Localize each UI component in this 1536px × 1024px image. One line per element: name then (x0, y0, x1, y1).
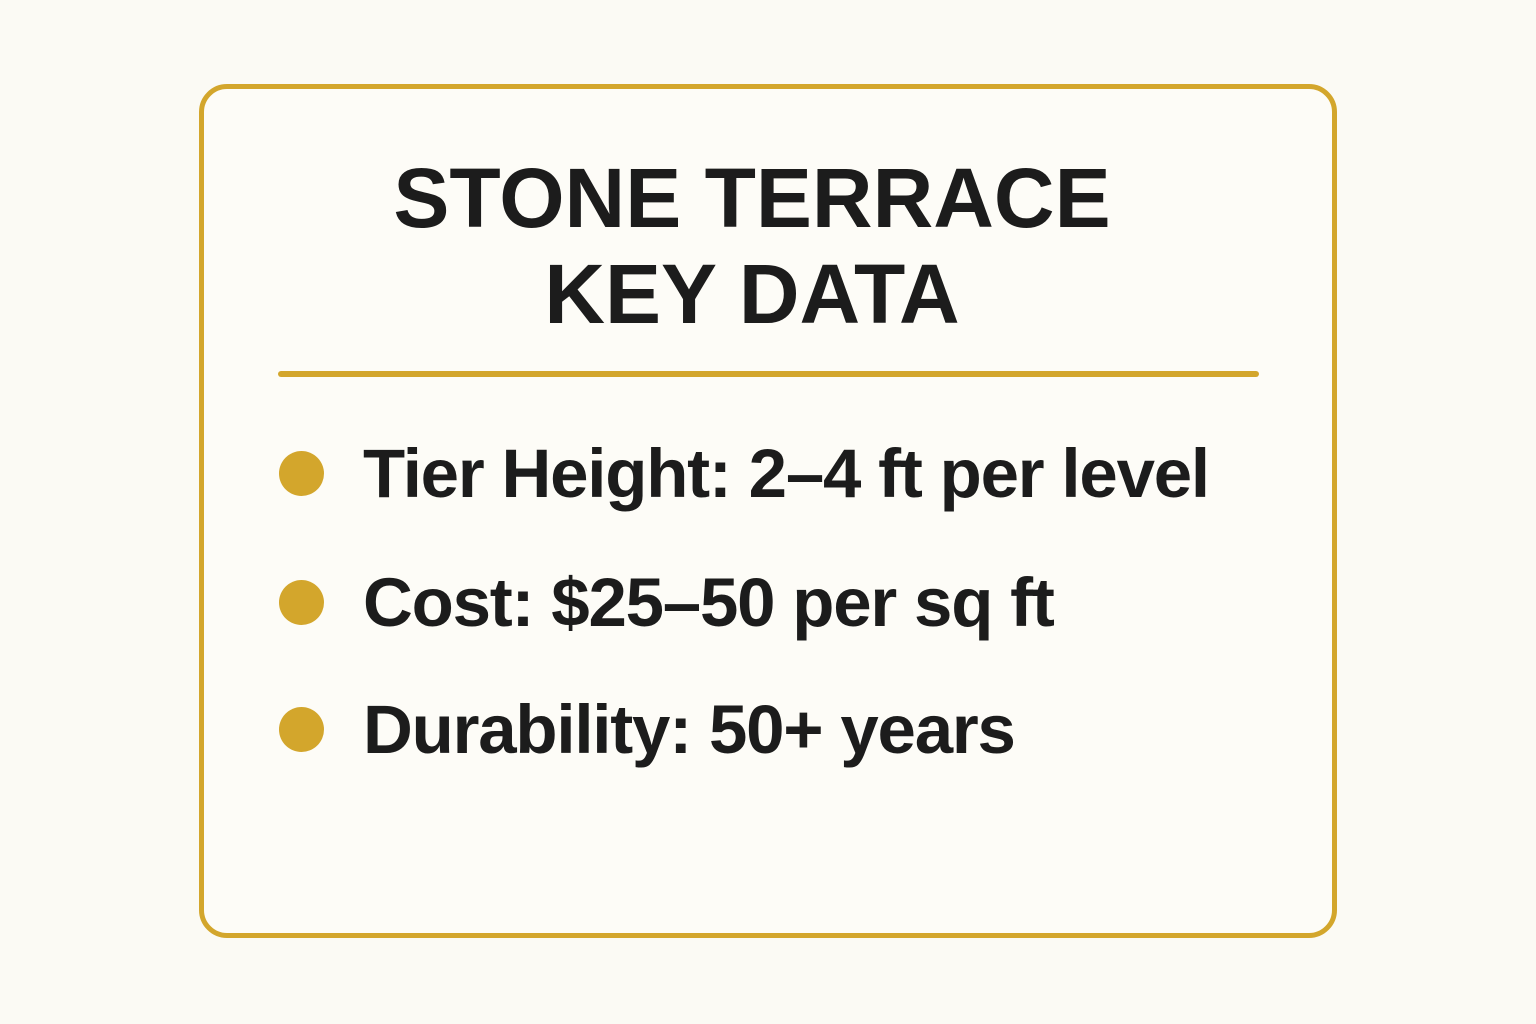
title: KEY DATA (544, 247, 960, 341)
bullet: cost: Cost: $25–50 per sq ft (363, 564, 1054, 641)
panel: key data card (199, 84, 1337, 938)
bullet: tier height: Tier Height: 2–4 ft per level (363, 435, 1209, 512)
title: STONE TERRACE (393, 151, 1111, 245)
divider (278, 371, 1259, 377)
title (393, 151, 1111, 341)
bullet: durability: Durability: 50+ years (363, 691, 1015, 768)
